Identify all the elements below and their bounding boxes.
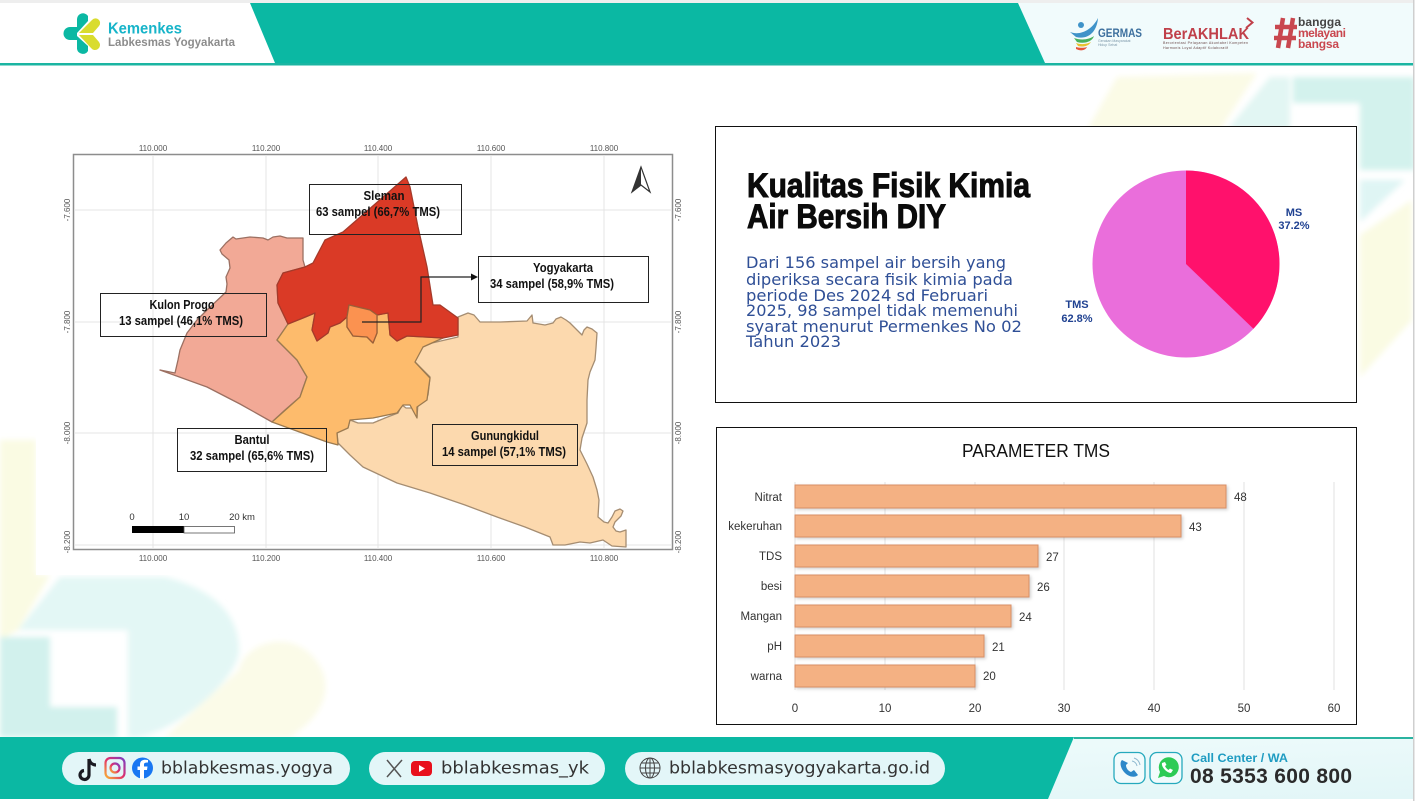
label: Kulon Progo: Kulon Progo — [150, 298, 215, 312]
category labels: Mangan — [740, 611, 782, 623]
logo: GERMAS: Gerakan Masyarakat — [1098, 39, 1131, 43]
pie chart: MS — [1286, 207, 1302, 219]
scale bar: 10 — [179, 512, 189, 523]
logo: BerAKHLAK: BerAKHLAK — [1163, 26, 1250, 43]
panel: map of DIY — [36, 125, 700, 575]
coordinate labels: 110.800 — [590, 144, 619, 153]
label: Bantul: Bantul — [234, 433, 270, 447]
panel: water quality summary — [716, 126, 1356, 402]
value labels — [983, 492, 1247, 683]
label: Sleman: 63 sampel (66,7% TMS) — [316, 205, 440, 219]
logo: BerAKHLAK: Harmonis Loyal Adaptif Kolaboratif — [1163, 46, 1228, 50]
icon: youtube — [411, 761, 432, 776]
scale bar: 20 km — [229, 512, 255, 523]
header bar — [0, 0, 1413, 66]
value labels: 26 — [1037, 582, 1050, 594]
coordinate labels: 110.000 — [139, 144, 168, 153]
arrow: Yogyakarta callout leader — [362, 274, 478, 322]
icon: tiktok — [80, 759, 96, 779]
call center — [1114, 751, 1352, 788]
pie chart: 37.2% — [1278, 220, 1310, 232]
coordinate labels: -7.600 — [674, 198, 683, 221]
logo: bangga melayani bangsa: bangga — [1298, 15, 1341, 29]
label: Sleman: Sleman — [364, 189, 404, 203]
coordinate labels: 110.200 — [252, 144, 281, 153]
map frame — [74, 154, 672, 550]
region: Yogyakarta — [347, 305, 377, 343]
website text: bblabkesmasyogyakarta.go.id — [669, 758, 930, 778]
coordinate labels: 110.600 — [477, 144, 506, 153]
description text: Tahun 2023 — [745, 332, 841, 351]
logo: GERMAS — [1070, 18, 1142, 50]
value labels: 48 — [1234, 492, 1247, 504]
icon: whatsapp — [1150, 752, 1182, 784]
icon: globe — [640, 758, 660, 778]
unit name: Labkesmas Yogyakarta — [108, 37, 236, 49]
logo: Kemenkes Labkesmas Yogyakarta — [64, 13, 236, 54]
title — [747, 167, 1031, 236]
label: Kulon Progo — [100, 294, 266, 336]
logo: bangga melayani bangsa — [1274, 15, 1346, 51]
region: Sleman — [277, 177, 458, 341]
category labels: pH — [767, 641, 782, 653]
description text: diperiksa secara fisik kimia pada — [746, 270, 1013, 289]
coordinate labels: -8.000 — [63, 421, 72, 444]
x axis labels: 10 — [879, 703, 891, 715]
label: Gunungkidul: Gunungkidul — [471, 429, 539, 443]
logo: bangga melayani bangsa: melayani — [1298, 26, 1346, 40]
title: Kualitas Fisik Kimia — [747, 167, 1031, 205]
pie chart: TMS — [1065, 299, 1089, 311]
pill: tiktok instagram facebook — [62, 752, 350, 785]
x axis labels: 60 — [1328, 703, 1340, 715]
region: Gunungkidul — [337, 313, 626, 547]
coordinate labels: -7.600 — [63, 198, 72, 221]
label: Sleman — [310, 184, 462, 234]
value labels: 21 — [992, 642, 1005, 654]
x axis labels: 50 — [1238, 703, 1250, 715]
brand name: Kemenkes — [108, 20, 182, 38]
category labels: warna — [750, 671, 783, 683]
pill: x youtube — [369, 752, 605, 785]
coordinate labels: 110.200 — [252, 554, 281, 563]
description text: syarat menurut Permenkes No 02 — [746, 317, 1022, 336]
logo: BerAKHLAK: Berorientasi Pelayanan Akuntabel Kompeten — [1163, 41, 1248, 45]
label: Bantul: 32 sampel (65,6% TMS) — [190, 449, 314, 463]
coordinate labels: -8.200 — [63, 530, 72, 553]
chart title: PARAMETER TMS — [962, 441, 1110, 461]
icon: instagram — [106, 758, 124, 778]
icon: x — [387, 760, 402, 777]
label: Kulon Progo: 13 sampel (46,1% TMS) — [119, 314, 243, 328]
coordinate labels: 110.000 — [139, 554, 168, 563]
scale bar — [129, 512, 255, 533]
description text: periode Des 2024 sd Februari — [746, 286, 988, 305]
category labels — [728, 492, 783, 683]
handle text: bblabkesmas.yogya — [161, 758, 333, 778]
icon: phone — [1114, 752, 1145, 784]
icon: facebook — [132, 758, 153, 779]
label: Gunungkidul — [432, 424, 578, 466]
x axis labels: 40 — [1148, 703, 1160, 715]
description text: Dari 156 sampel air bersih yang — [746, 253, 1006, 272]
handle text: bblabkesmas_yk — [441, 758, 589, 778]
coordinate labels: 110.400 — [364, 554, 393, 563]
coordinate labels: -7.800 — [63, 310, 72, 333]
footer bar — [0, 737, 1413, 799]
logo: bangga melayani bangsa: bangsa — [1298, 37, 1339, 51]
label: Yogyakarta: Yogyakarta — [533, 261, 594, 275]
title: Air Bersih DIY — [747, 198, 946, 236]
coordinate labels: -8.000 — [674, 421, 683, 444]
logo: BerAKHLAK — [1163, 18, 1252, 50]
value labels: 27 — [1046, 552, 1059, 564]
pie chart: 62.8% — [1061, 313, 1093, 325]
category labels: besi — [761, 581, 782, 593]
pill: website — [625, 752, 945, 785]
logo: GERMAS: Hidup Sehat — [1098, 43, 1117, 47]
region: Bantul — [272, 313, 443, 445]
category labels: kekeruhan — [728, 521, 782, 533]
description text: 2025, 98 sampel tidak memenuhi — [746, 301, 1018, 320]
panel: parameter TMS bar chart — [716, 428, 1356, 724]
x axis labels: 0 — [792, 703, 798, 715]
coordinate labels: 110.800 — [590, 554, 619, 563]
label: Yogyakarta — [478, 256, 648, 302]
coordinate labels: -8.200 — [674, 530, 683, 553]
scale bar: 0 — [129, 512, 135, 523]
coordinate labels — [63, 144, 683, 563]
phone number: 08 5353 600 800 — [1190, 765, 1352, 788]
coordinate labels: -7.800 — [674, 310, 683, 333]
label: Bantul — [178, 428, 326, 472]
label: Gunungkidul: 14 sampel (57,1% TMS) — [442, 445, 566, 459]
coordinate labels: 110.400 — [364, 144, 393, 153]
category labels: TDS — [759, 551, 782, 563]
bars — [795, 485, 1226, 687]
region: Kulon Progo — [160, 236, 307, 422]
logo: GERMAS: GERMAS — [1098, 26, 1142, 40]
value labels: 43 — [1189, 522, 1202, 534]
call center label: Call Center / WA — [1191, 751, 1288, 765]
category labels: Nitrat — [755, 492, 783, 504]
x axis labels — [792, 703, 1340, 715]
x axis labels: 20 — [969, 703, 981, 715]
value labels: 24 — [1019, 612, 1032, 624]
pie chart — [1061, 170, 1310, 358]
description text — [745, 253, 1022, 351]
x axis labels: 30 — [1058, 703, 1070, 715]
label: Yogyakarta: 34 sampel (58,9% TMS) — [490, 277, 614, 291]
value labels: 20 — [983, 671, 996, 683]
icon: north arrow — [632, 167, 650, 192]
coordinate labels: 110.600 — [477, 554, 506, 563]
